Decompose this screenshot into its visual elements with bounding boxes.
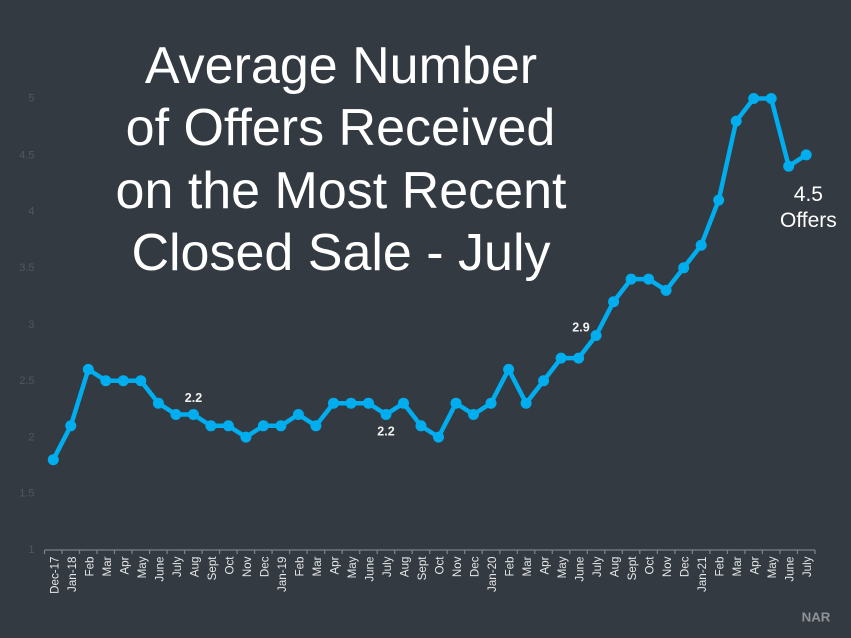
title: of Offers Received (126, 99, 555, 157)
y axis labels: 3 (28, 319, 34, 331)
x axis month labels: Mar (101, 556, 114, 576)
title: on the Most Recent (116, 162, 567, 220)
x axis month labels: Apr (329, 556, 342, 575)
x axis month labels: Mar (521, 556, 534, 576)
x axis month labels: May (556, 556, 569, 578)
x axis month labels: Nov (241, 556, 254, 577)
x axis month labels: Mar (731, 556, 744, 576)
callout: 2.9 July 2020: 2.9 (572, 320, 590, 334)
x axis month labels: Feb (294, 556, 307, 576)
x axis month labels: Dec (469, 556, 482, 577)
x axis month labels: June (364, 556, 377, 582)
title: Closed Sale - July (131, 224, 551, 282)
callout: 2.2 July 2019: 2.2 (377, 425, 395, 439)
x axis month labels: Dec-17 (48, 556, 61, 594)
line chart: offers series (48, 93, 812, 465)
x axis month labels: Aug (399, 556, 412, 577)
y axis labels: 4.5 (19, 150, 34, 162)
x axis month labels: Aug (609, 556, 622, 577)
title: Average Number (145, 37, 537, 95)
x axis month labels: July (381, 556, 394, 577)
y axis labels: 4 (28, 206, 34, 218)
x axis month labels: Sept (626, 556, 639, 580)
y axis labels: 2.5 (19, 375, 34, 387)
x axis month labels: Feb (714, 556, 727, 576)
y axis labels: 3.5 (19, 262, 34, 274)
x axis month labels: Dec (679, 556, 692, 577)
x axis month labels: Apr (539, 556, 552, 575)
x axis month labels: Apr (118, 556, 131, 575)
x axis month labels: May (766, 556, 779, 578)
x axis month labels: Apr (749, 556, 762, 575)
y axis labels: 1 (28, 544, 34, 556)
y axis labels: 1.5 (19, 488, 34, 500)
source: NAR: NAR (802, 610, 831, 625)
x axis month labels: July (171, 556, 184, 577)
x axis month labels: Nov (661, 556, 674, 577)
x axis month labels: Jan-20 (486, 556, 499, 592)
x axis month labels: Dec (258, 556, 271, 577)
x axis month labels: July (801, 556, 814, 577)
x axis month labels: Aug (188, 556, 201, 577)
x axis month labels: Jan-19 (276, 556, 289, 592)
callout: 4.5 offers: Offers (780, 209, 837, 232)
x axis month labels: Jan-18 (66, 556, 79, 592)
x axis month labels: June (153, 556, 166, 582)
callout: 2.2 Aug 2018: 2.2 (185, 391, 202, 405)
x axis month labels: Jan-21 (696, 556, 709, 592)
x axis month labels: July (591, 556, 604, 577)
x axis line and ticks (44, 550, 815, 554)
y axis labels (19, 92, 34, 556)
y axis labels: 2 (28, 432, 34, 444)
x axis month labels: Feb (83, 556, 96, 576)
x axis month labels: Feb (504, 556, 517, 576)
x axis month labels: Sept (416, 556, 429, 580)
x axis month labels: Oct (223, 556, 236, 575)
x axis month labels: Oct (434, 556, 447, 575)
x axis month labels: Nov (451, 556, 464, 577)
data points (48, 93, 812, 465)
x axis month labels: June (784, 556, 797, 582)
callout: 4.5 offers: 4.5 (794, 183, 823, 206)
x axis month labels: Mar (311, 556, 324, 576)
x axis month labels: Oct (644, 556, 657, 575)
x axis month labels: June (574, 556, 587, 582)
y axis labels: 5 (28, 92, 34, 104)
x axis month labels: Sept (206, 556, 219, 580)
x axis month labels: May (346, 556, 359, 578)
x axis month labels: May (136, 556, 149, 578)
x axis month labels (48, 556, 814, 594)
